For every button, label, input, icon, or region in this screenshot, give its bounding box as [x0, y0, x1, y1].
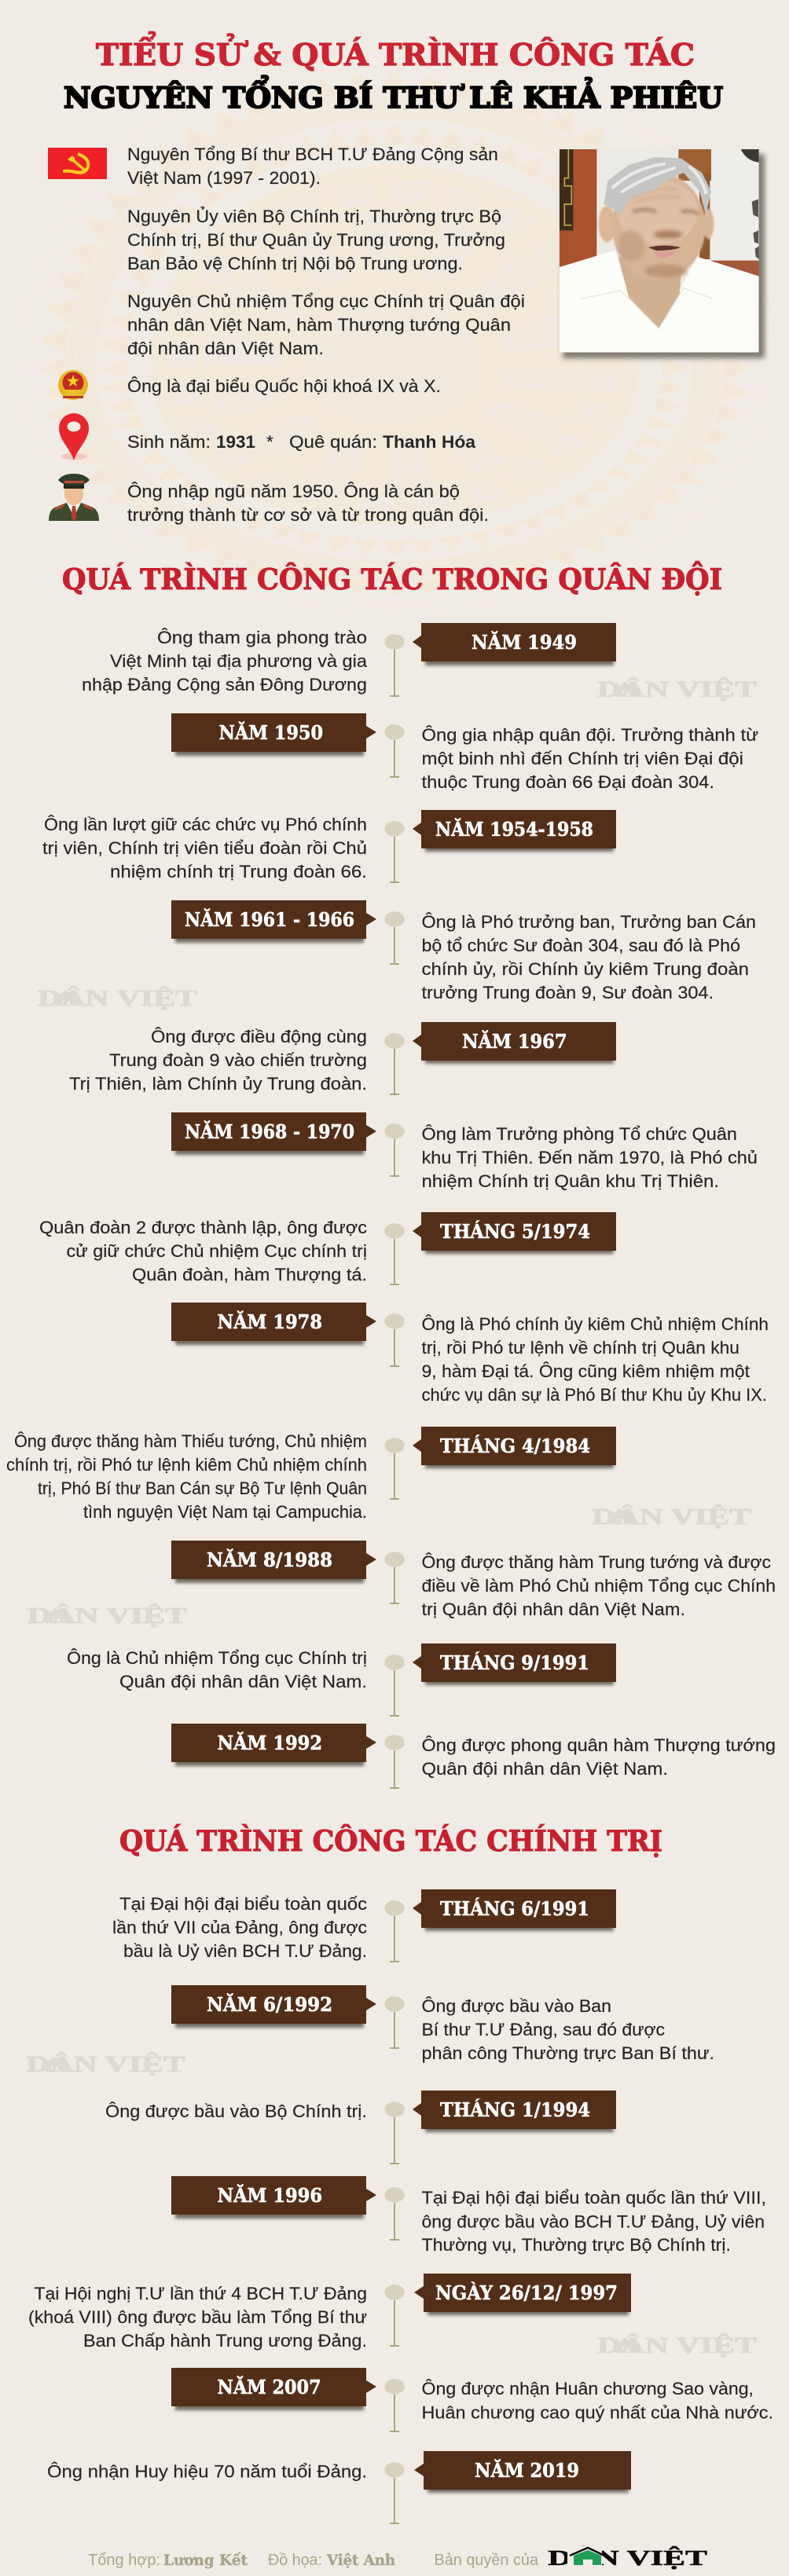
- watermark: DÂN VIỆT: [28, 1604, 187, 1629]
- watermark: [597, 678, 757, 702]
- timeline row: Tháng 9/1991: [67, 1643, 616, 1717]
- text: birth and hometown: Thanh Hóa: [383, 432, 475, 452]
- footer credits: Lương Kết: [163, 2552, 248, 2569]
- description: Trị Thiên, làm Chính ủy Trung đoàn.: [69, 1074, 367, 1094]
- title: NGUYÊN TỔNG BÍ THƯ LÊ KHẢ PHIÊU: [64, 76, 723, 115]
- date label: [171, 1112, 376, 1155]
- date label: NĂM 1978: [217, 1310, 322, 1333]
- text: positions held: đội nhân dân Việt Nam.: [127, 339, 324, 358]
- watermark: DÂN VIỆT: [597, 678, 757, 702]
- description: điều về làm Phó Chủ nhiệm Tổng cục Chính: [421, 1576, 776, 1596]
- date label: [413, 1643, 616, 1685]
- timeline marker: [384, 1123, 405, 1177]
- description: Ông lần lượt giữ các chức vụ Phó chính: [44, 815, 367, 834]
- text: military career summary: [127, 482, 489, 525]
- description: [421, 1735, 776, 1779]
- timeline row: Tháng 5/1974: [39, 1212, 616, 1285]
- description: tình nguyện Việt Nam tại Campuchia.: [83, 1502, 367, 1522]
- text: positions held: Chính trị, Bí thư Quân ủy Trung ương, Trưởng: [127, 230, 505, 250]
- description: nhập Đảng Cộng sản Đông Dương: [82, 675, 367, 694]
- timeline marker: [384, 911, 405, 965]
- description: một binh nhì đến Chính trị viên Đại đội: [421, 749, 743, 768]
- title: TIỂU SỬ & QUÁ TRÌNH CÔNG TÁC: [96, 32, 695, 72]
- description: Ông làm Trưởng phòng Tổ chức Quân: [421, 1124, 737, 1144]
- text: military career summary: trưởng thành từ cơ sở và từ trong quân đội.: [127, 505, 489, 525]
- description: Ông gia nhập quân đội. Trưởng thành từ: [421, 725, 758, 745]
- timeline marker: [384, 1438, 405, 1500]
- description: Tại Đại hội đại biểu toàn quốc: [119, 1894, 367, 1914]
- timeline marker: [384, 2187, 405, 2241]
- date label: [171, 1985, 376, 2028]
- date label: THÁNG 6/1991: [440, 1897, 589, 1920]
- description: lần thứ VII của Đảng, ông được: [112, 1918, 367, 1937]
- timeline row: Năm 1967: [69, 1022, 616, 1095]
- timeline row: Năm 2007: [171, 2368, 773, 2432]
- date label: [413, 623, 616, 665]
- date label: NĂM 1996: [217, 2184, 322, 2207]
- date label: NĂM 1950: [218, 721, 323, 744]
- icon: national emblem: [58, 370, 88, 400]
- description: trưởng Trung đoàn 9, Sư đoàn 304.: [421, 983, 714, 1002]
- timeline marker: [384, 724, 405, 778]
- timeline row: Năm 1978: [171, 1303, 769, 1405]
- description: trị, Phó Bí thư Ban Cán sự Bộ Tư lệnh Quân: [38, 1479, 367, 1498]
- description: [421, 1314, 769, 1405]
- description: [42, 815, 367, 881]
- timeline row: Năm 2019: [47, 2451, 631, 2524]
- date label: [171, 900, 376, 943]
- description: cử giữ chức Chủ nhiệm Cục chính trị: [66, 1241, 367, 1261]
- description: [421, 2188, 766, 2255]
- date label: NĂM 6/1992: [207, 1993, 332, 2016]
- timeline row: Ngày 26/12/1997: [28, 2274, 631, 2351]
- title: [64, 32, 723, 115]
- description: [421, 725, 758, 792]
- icon: party flag: [48, 148, 107, 179]
- date label: NGÀY 26/12/ 1997: [435, 2281, 618, 2304]
- watermark: DÂN VIỆT: [592, 1505, 751, 1530]
- description: chức vụ dân sự là Phó Bí thư Khu ủy Khu IX.: [421, 1385, 767, 1405]
- description: bầu là Uỷ viên BCH T.Ư Đảng.: [123, 1941, 367, 1961]
- icon: location pin: [59, 413, 89, 460]
- description: Ông là Chủ nhiệm Tổng cục Chính trị: [67, 1648, 367, 1668]
- description: [82, 628, 368, 694]
- date label: NĂM 1949: [472, 631, 577, 654]
- date label: [413, 1022, 616, 1064]
- text: positions held: Nguyên Ủy viên Bộ Chính trị, Thường trực Bộ: [127, 207, 501, 226]
- timeline row: Năm 6/1992: [171, 1985, 714, 2063]
- timeline marker: [384, 2462, 405, 2524]
- description: Tại Đại hội đại biểu toàn quốc lần thứ VIII,: [421, 2188, 766, 2208]
- timeline row: Tháng 6/1991: [112, 1889, 616, 1962]
- description: chính trị, rồi Phó tư lệnh kiêm Chủ nhiệm chính: [6, 1455, 367, 1475]
- description: Ông được nhận Huân chương Sao vàng,: [421, 2379, 754, 2398]
- description: Trung đoàn 9 vào chiến trường: [109, 1050, 367, 1070]
- text: birth and hometown: 1931: [216, 432, 255, 452]
- timeline row: Năm 1954-1958: [42, 810, 616, 883]
- description: Quân đội nhân dân Việt Nam.: [421, 1759, 668, 1779]
- description: ông được bầu vào BCH T.Ư Đảng, Uỷ viên: [421, 2212, 765, 2231]
- date label: [171, 1724, 376, 1766]
- timeline marker: [384, 821, 405, 883]
- description: Ông là Phó trưởng ban, Trưởng ban Cán: [421, 912, 756, 932]
- watermark: [28, 1604, 187, 1629]
- description: [421, 1996, 714, 2063]
- description: Ông được thăng hàm Thiếu tướng, Chủ nhiệm: [14, 1431, 367, 1451]
- watermark: [597, 2334, 757, 2358]
- description: Ban Chấp hành Trung ương Đảng.: [83, 2331, 367, 2351]
- description: nhiệm Chính trị Quân khu Trị Thiên.: [421, 1171, 719, 1191]
- timeline marker: [384, 1314, 405, 1367]
- date label: [171, 2368, 376, 2410]
- text: birth and hometown: Quê quán:: [289, 432, 377, 452]
- description: 9, hàm Đại tá. Ông cũng kiêm nhiệm một: [421, 1361, 750, 1381]
- date label: THÁNG 9/1991: [440, 1651, 589, 1674]
- date label: [171, 2176, 376, 2219]
- date label: THÁNG 4/1984: [440, 1435, 590, 1457]
- date label: [413, 1212, 616, 1254]
- description: [112, 1894, 367, 1961]
- timeline marker: [384, 634, 405, 697]
- description: Ông được thăng hàm Trung tướng và được: [421, 1552, 771, 1572]
- description: trị Quân đội nhân dân Việt Nam.: [421, 1599, 685, 1619]
- description: Ông nhận Huy hiệu 70 năm tuổi Đảng.: [47, 2462, 367, 2481]
- description: Việt Minh tại địa phương và gia: [110, 651, 368, 671]
- timeline marker: [384, 1900, 405, 1962]
- timeline marker: [384, 2285, 405, 2347]
- date label: [414, 2274, 631, 2315]
- description: [28, 2284, 367, 2351]
- timeline marker: [384, 1033, 405, 1095]
- date label: [413, 2090, 616, 2132]
- description: Ông được bầu vào Bộ Chính trị.: [105, 2101, 367, 2121]
- date label: THÁNG 1/1994: [440, 2098, 590, 2121]
- description: Ông được bầu vào Ban: [421, 1996, 611, 2016]
- background emblem watermark: [12, 48, 777, 614]
- timeline marker: [384, 2101, 405, 2164]
- description: Ông được phong quân hàm Thượng tướng: [421, 1735, 776, 1755]
- description: [39, 1218, 367, 1284]
- description: Ông là Phó chính ủy kiêm Chủ nhiệm Chính: [421, 1314, 769, 1334]
- text: national assembly delegate: Ông là đại biểu Quốc hội khoá IX và X.: [127, 376, 441, 396]
- timeline row: Năm 1968 - 1970: [171, 1112, 758, 1191]
- text: positions held: nhân dân Việt Nam, hàm Thượng tướng Quân: [127, 315, 511, 335]
- date label: NĂM 1967: [462, 1030, 567, 1053]
- timeline row: Tháng 4/1984: [6, 1427, 616, 1522]
- footer credits: Bản quyền của: [434, 2552, 539, 2569]
- description: trị, rồi Phó tư lệnh về chính trị Quân khu: [421, 1338, 739, 1358]
- timeline row: Năm 1996: [171, 2176, 766, 2255]
- text: birth and hometown: Sinh năm:: [127, 432, 211, 452]
- footer credits: Đồ họa:: [268, 2552, 322, 2569]
- timeline row: Tháng 1/1994: [105, 2090, 616, 2164]
- watermark: DÂN VIỆT: [26, 2053, 185, 2077]
- description: Quân đoàn, hàm Thượng tá.: [132, 1265, 367, 1284]
- description: [421, 912, 756, 1002]
- text: positions held: Ban Bảo vệ Chính trị Nội bộ Trung ương.: [127, 254, 463, 273]
- timeline row: Năm 8/1988: [171, 1541, 776, 1619]
- description: Bí thư T.Ư Đảng, sau đó được: [421, 2020, 665, 2039]
- description: Huân chương cao quý nhất của Nhà nước.: [421, 2402, 773, 2423]
- description: phân công Thường trực Ban Bí thư.: [421, 2043, 714, 2063]
- timeline row: Năm 1992: [171, 1724, 776, 1789]
- description: khu Trị Thiên. Đến năm 1970, là Phó chủ: [421, 1148, 758, 1167]
- timeline row: Năm 1949: [82, 623, 616, 697]
- description: trị viên, Chính trị viên tiểu đoàn rồi Chủ: [42, 838, 367, 858]
- icon: soldier: [49, 474, 99, 522]
- timeline marker: [384, 1996, 405, 2049]
- description: thuộc Trung đoàn 66 Đại đoàn 304.: [421, 772, 714, 792]
- text: military career summary: Ông nhập ngũ năm 1950. Ông là cán bộ: [127, 482, 460, 501]
- footer credits: Tổng hợp:: [88, 2552, 160, 2569]
- date label: NĂM 2007: [217, 2376, 321, 2398]
- text: positions held: Nguyên Chủ nhiệm Tổng cục Chính trị Quân đội: [127, 291, 525, 311]
- date label: [413, 810, 616, 852]
- watermark: [592, 1505, 751, 1530]
- timeline marker: [384, 2379, 405, 2432]
- description: Quân đoàn 2 được thành lập, ông được: [39, 1218, 367, 1237]
- description: Ông tham gia phong trào: [157, 628, 367, 647]
- date label: THÁNG 5/1974: [440, 1220, 590, 1243]
- date label: [171, 1303, 376, 1345]
- description: [69, 1027, 367, 1094]
- date label: NĂM 1954-1958: [435, 818, 593, 841]
- date label: NĂM 2019: [475, 2459, 579, 2482]
- timeline marker: [384, 1552, 405, 1604]
- description: [421, 1552, 776, 1619]
- timeline marker: [384, 1654, 405, 1717]
- date label: NĂM 8/1988: [207, 1548, 332, 1571]
- timeline row: Năm 1961 - 1966: [171, 900, 756, 1002]
- text: positions held: Việt Nam (1997 - 2001).: [127, 168, 321, 188]
- date label: NĂM 1961 - 1966: [185, 908, 354, 931]
- date label: [413, 1427, 616, 1468]
- description: Quân đội nhân dân Việt Nam.: [119, 1672, 367, 1691]
- date label: [171, 713, 376, 756]
- description: [6, 1431, 367, 1522]
- heading: political career: QUÁ TRÌNH CÔNG TÁC CHÍNH TRỊ: [119, 1825, 662, 1858]
- timeline marker: [384, 1735, 405, 1789]
- description: bộ tổ chức Sư đoàn 304, sau đó là Phó: [421, 936, 740, 955]
- watermark: DÂN VIỆT: [38, 987, 197, 1011]
- description: Tại Hội nghị T.Ư lần thứ 4 BCH T.Ư Đảng: [35, 2284, 367, 2303]
- date label: NĂM 1968 - 1970: [185, 1120, 354, 1143]
- text: positions held: [127, 145, 525, 358]
- description: [67, 1648, 367, 1691]
- portrait photo: [560, 149, 765, 358]
- logo: Dân Việt: [548, 2546, 707, 2570]
- date label: [413, 1889, 616, 1931]
- description: nhiệm chính trị Trung đoàn 66.: [110, 862, 367, 881]
- footer credits: Việt Anh: [326, 2552, 395, 2569]
- description: Thường vụ, Thường trực Bộ Chính trị.: [421, 2235, 731, 2255]
- description: chính ủy, rồi Chính ủy kiêm Trung đoàn: [421, 959, 749, 979]
- timeline marker: [384, 1223, 405, 1285]
- logo: Dân Việt: DÂN VIỆT: [548, 2546, 707, 2570]
- date label: [171, 1541, 376, 1583]
- date label: [414, 2451, 631, 2493]
- description: [421, 2379, 773, 2423]
- description: [421, 1124, 758, 1191]
- watermark: [38, 987, 197, 1011]
- text: birth and hometown: [127, 432, 475, 452]
- date label: NĂM 1992: [217, 1731, 322, 1754]
- watermark: DÂN VIỆT: [597, 2334, 757, 2358]
- timeline row: Năm 1950: [171, 713, 758, 792]
- description: Ông được điều động cùng: [151, 1027, 367, 1046]
- heading: military career: QUÁ TRÌNH CÔNG TÁC TRONG QUÂN ĐỘI: [62, 561, 722, 596]
- description: (khoá VIII) ông được bầu làm Tổng Bí thư: [28, 2307, 367, 2327]
- watermark: [26, 2053, 185, 2077]
- top band: [0, 0, 789, 28]
- text: birth and hometown: *: [266, 432, 273, 452]
- text: positions held: Nguyên Tổng Bí thư BCH T.Ư Đảng Cộng sản: [127, 145, 498, 164]
- footer credits: [88, 2552, 539, 2569]
